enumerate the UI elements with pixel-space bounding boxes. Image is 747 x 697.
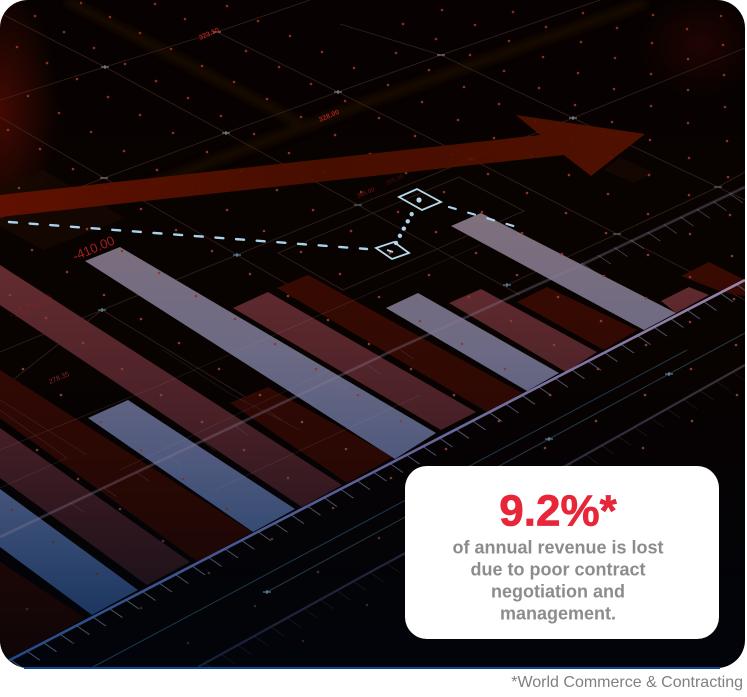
bars [0,213,745,658]
small red chart value labels: 328.00 [318,109,341,124]
upper diamond marker [399,189,441,210]
pink bars [0,265,709,585]
lower diamond marker [376,242,409,259]
small red chart value labels: 278.35 [48,371,71,386]
mauve axis line with ticks [0,187,747,537]
dark red bars [0,262,745,658]
small red chart value labels: 323.50 [198,27,221,42]
small red chart value labels: 395.00 [356,187,376,200]
small red chart value labels: -410.00 [70,233,117,264]
grid node markers [98,32,722,594]
dim background diamonds [0,157,654,250]
statistic description: management. [500,604,616,624]
ruler axis baseline with ticks [8,280,747,664]
red rising arrow [0,115,645,217]
statistic description: due to poor contract [470,560,646,580]
light blue-grey bars [0,213,676,615]
background streaks [66,0,647,185]
statistic description [452,538,664,624]
small red chart value labels: 305.00 [385,174,405,187]
statistic description: negotiation and [491,582,625,602]
statistic description: of annual revenue is lost [452,538,664,558]
small red chart value labels [7,27,405,386]
grid lines over bars [0,245,480,490]
small red chart value labels: -1120.00 [7,291,55,322]
lower blue and mauve guide lines [93,333,747,668]
callout card [405,466,719,639]
source footnote: *World Commerce & Contracting [511,674,743,691]
light blue dashed trend line [9,207,517,249]
big statistic: 9.2%* [499,487,618,536]
perspective grid lines [0,0,745,430]
